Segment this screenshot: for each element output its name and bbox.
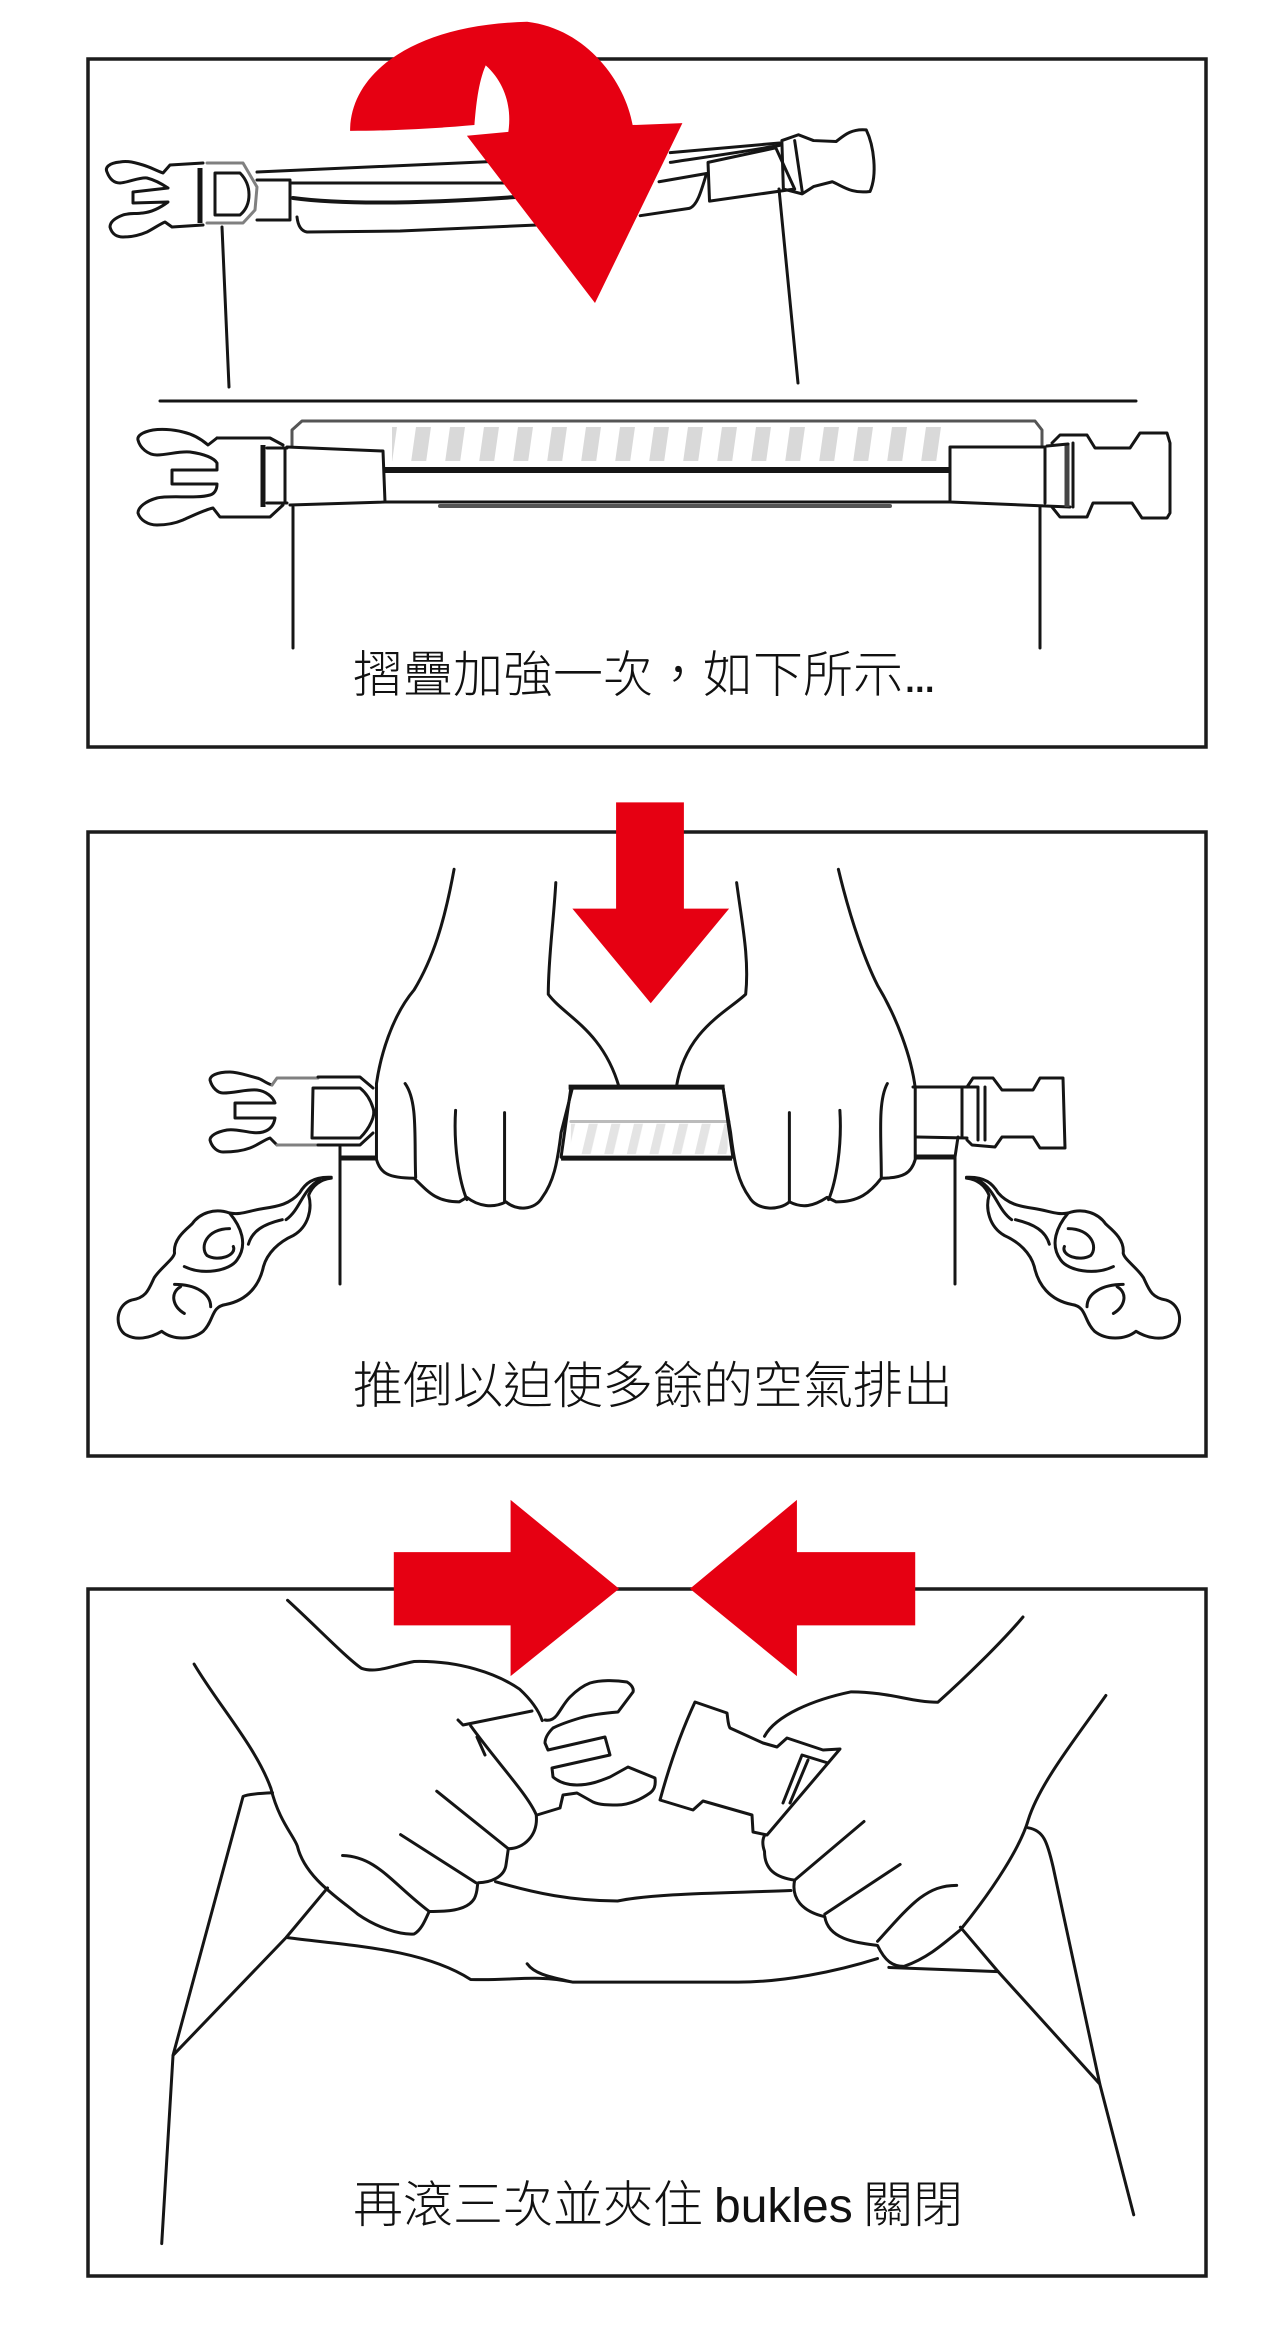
caption: roll and clip: 關閉 xyxy=(863,2177,963,2233)
upper strap belly line xyxy=(293,196,530,203)
caption: roll and clip: 再滾三次並夾住 xyxy=(353,2177,703,2233)
caption: fold once more: ... xyxy=(903,647,933,703)
horizontal divider line xyxy=(160,400,1136,402)
icon: red right arrow xyxy=(394,1500,619,1676)
icon: air puff right xyxy=(966,1177,1180,1338)
panel: push down to expel air xyxy=(88,802,1206,1456)
wrists behind the arrow xyxy=(548,883,747,1087)
upper strap right buckle group xyxy=(640,130,874,216)
guide lines from folded strap xyxy=(293,507,1040,648)
left buckle xyxy=(458,1681,655,1815)
panel frame xyxy=(88,1589,1206,2276)
panel: fold once more xyxy=(88,22,1206,747)
upper strap left buckle xyxy=(106,161,257,237)
caption: roll and clip: bukles xyxy=(714,2180,853,2233)
lower strap left buckle xyxy=(138,429,287,525)
left hand xyxy=(376,869,572,1208)
left buckle xyxy=(210,1072,377,1158)
right hand xyxy=(763,1617,1106,1966)
lower strap right buckle xyxy=(1047,433,1170,518)
bag right side xyxy=(960,1828,1134,2215)
panel frame xyxy=(88,59,1206,747)
guide lines from upper strap xyxy=(222,189,798,387)
lower strap band xyxy=(287,447,1070,507)
right hand xyxy=(723,869,915,1208)
rolled pouch xyxy=(288,1882,998,1982)
panel: roll three times and clip buckles xyxy=(88,1500,1206,2276)
icon: red down arrow xyxy=(572,802,729,1003)
icon: red curved fold arrow xyxy=(350,22,682,303)
icon: red left arrow xyxy=(690,1500,915,1676)
hatched pouch top xyxy=(292,421,1042,461)
upper strap body xyxy=(257,160,560,232)
icon: air puff left xyxy=(118,1177,331,1338)
bag left side xyxy=(162,1793,327,2244)
caption: fold once more: 摺疊加強一次，如下所示 xyxy=(353,647,903,703)
right buckle xyxy=(913,1078,1065,1157)
panel frame xyxy=(88,832,1206,1456)
left hand xyxy=(194,1600,542,1934)
strap section between the hands xyxy=(561,1087,733,1158)
caption: push down: 推倒以迫使多餘的空氣排出 xyxy=(353,1358,953,1414)
guide lines xyxy=(340,1147,955,1284)
right buckle xyxy=(660,1702,840,1835)
